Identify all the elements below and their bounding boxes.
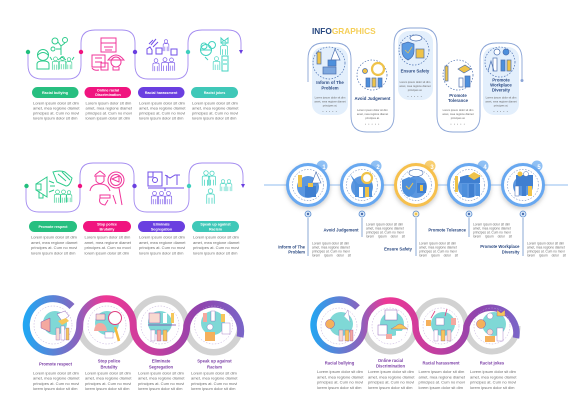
icon: speak up against racism [194,306,232,344]
step 4 [448,160,490,217]
icon: ensure safety [399,35,429,65]
pale card backgrounds [312,31,519,115]
description texts: principes at. Cum no movi [84,245,131,250]
step descriptions: lorem ipsum dolor sit [473,234,512,238]
label pills: Racism [209,228,223,232]
ribbon titles: Speak up against [197,358,232,364]
description texts: amet, mea regione diamet [193,240,240,245]
card titles: Ensure Safety [401,68,430,74]
card titles [316,68,512,103]
step descriptions: Lorem ipsum dolor sit dim [473,222,510,226]
icon: racist jokes [474,308,510,344]
card descriptions and dots: • • • • • [408,96,422,98]
ribbon titles: Brutality [100,364,118,370]
icon: stop police brutality [88,306,126,344]
step descriptions: Lorem ipsum dolor sit dim [419,242,456,246]
step titles: Promote Tolerance [428,228,467,232]
icon: inform of the problem [313,47,345,79]
card descriptions and dots: principes at. [323,104,337,108]
serpentine line [28,30,241,79]
label pills: Discrimination [95,93,122,97]
ribbon descriptions: amet, mea regione diamet [33,376,80,380]
panel: racial issues gradient ribbon [314,300,518,390]
description texts: Lorem ipsum dolor sit dim [33,100,79,106]
ribbon descriptions [317,369,517,390]
ribbon descriptions: amet, mea regione diamet [470,374,517,380]
description texts: amet, mea regione diamet [139,240,186,245]
ribbon titles: Racist jokes [480,360,505,366]
ribbon descriptions: amet, mea regione diamet [191,376,238,380]
step titles: Inform of The [278,244,306,250]
ribbon titles [325,358,505,368]
step titles: Diversity [502,250,520,254]
step descriptions: principes at. Cum no movi [312,250,350,254]
ribbon descriptions: amet, mea regione diamet [138,376,185,380]
step descriptions: amet, mea regione diamet [312,246,350,250]
description texts: lorem ipsum dolor sit dim [139,116,184,120]
step descriptions: Lorem ipsum dolor sit dim [527,242,564,246]
step descriptions [312,222,566,258]
icon: speak up against racism [202,171,232,204]
step descriptions: Lorem ipsum dolor sit dim [366,222,403,226]
icon: promote workplace diversity [485,47,515,77]
description texts: principes at. Cum no movi [33,110,79,116]
ribbon descriptions: lorem ipsum dolor sit dim [138,386,183,391]
icon: eliminate segregation [148,172,184,204]
label pills: Eliminate [153,222,170,226]
ribbon descriptions: principes at. Cum no movi [85,381,131,386]
ribbon titles: Segregation [149,364,174,370]
description texts [33,100,239,120]
ribbon descriptions: Lorem ipsum dolor sit dim [85,370,131,376]
ribbon titles [39,358,232,370]
ribbon descriptions: principes at. Cum no movi [317,380,363,384]
description texts: Lorem ipsum dolor sit dim [139,100,185,106]
serpentine line [26,163,243,212]
description texts: principes at. Cum no movi [31,245,77,250]
description texts: principes at. Cum no movi [192,110,238,116]
serpentine outline [308,28,522,132]
grey ribbon [80,299,240,352]
card descriptions and dots: amet, mea regione diamet [357,112,388,116]
icon: eliminate segregation [141,306,179,344]
title: INFOGRAPHICS [312,26,376,36]
label pills: Racist jokes [204,91,225,95]
step descriptions: amet, mea regione diamet [473,226,511,230]
card descriptions and dots: • • • • • [451,123,465,126]
ribbon descriptions: lorem ipsum dolor sit dim [317,385,362,390]
ribbon descriptions: principes at. Cum no movi [138,381,184,386]
description texts: amet, mea regione diamet [31,240,78,245]
label pills: Promote respect [38,225,68,229]
description texts: principes at. Cum no movi [139,110,185,116]
step descriptions: principes at. Cum no movi [366,230,404,234]
description texts: principes at. Cum no movi [193,245,239,250]
icon: racist jokes [200,38,228,71]
card titles: Avoid Judgement [355,96,391,101]
label pills: Brutality [100,228,115,232]
step titles: Avoid Judgement [324,228,359,232]
ribbon descriptions: Lorem ipsum dolor sit dim [368,369,414,374]
step descriptions: principes at. Cum no movi [473,230,511,234]
ribbon descriptions: Lorem ipsum dolor sit dim [191,370,237,376]
ribbon titles: Racial harassment [422,360,460,366]
icon: online racial discrimination [372,308,408,344]
description texts: Lorem ipsum dolor sit dim [84,234,131,240]
step titles [278,228,520,254]
ribbon descriptions: principes at. Cum no movi [470,380,516,384]
panel: infographics cards [308,26,524,132]
label pills [32,87,238,98]
ribbon titles: Racism [207,364,222,370]
card descriptions and dots: principes at. [451,116,465,120]
gradient ribbon [26,299,241,352]
description texts: amet, mea regione diamet [139,106,186,110]
step descriptions: lorem ipsum dolor sit [312,254,351,258]
step descriptions: amet, mea regione diamet [527,246,565,250]
ribbon descriptions: amet, mea regione diamet [317,374,364,380]
ribbon descriptions: principes at. Cum no movi [191,381,237,386]
ribbon titles: Stop police [98,358,121,364]
label pills: Online racial [97,88,119,92]
card descriptions and dots: Lorem ipsum dolor sit dim [443,108,474,112]
ribbon descriptions: amet, mea regione diamet [368,374,415,380]
icons [313,35,515,90]
card descriptions and dots: • • • • • [365,123,380,126]
description texts: Lorem ipsum dolor sit dim [86,100,132,106]
step 5 [502,160,544,217]
ribbon titles: Discrimination [376,364,405,368]
step 5: 5 [537,165,541,171]
description texts: amet, mea regione diamet [33,106,80,110]
description texts: amet, mea regione diamet [192,106,239,110]
card titles: Inform of The [316,80,344,85]
label pills: Speak up against [200,222,231,226]
step markers [24,184,245,188]
card titles: Diversity [492,88,511,92]
description texts: lorem ipsum dolor sit dim [193,250,238,256]
card descriptions and dots: Lorem ipsum dolor sit dim [315,96,346,100]
card descriptions and dots: principes at. [494,104,508,108]
ribbon descriptions: Lorem ipsum dolor sit dim [470,369,516,374]
icon: stop police brutality [90,171,124,205]
ribbon descriptions: lorem ipsum dolor sit dim [33,386,78,391]
description texts: lorem ipsum dolor sit dim [139,250,184,256]
card descriptions and dots: • • • • • [494,110,508,114]
ribbon descriptions: lorem ipsum dolor sit dim [85,386,130,391]
description texts: lorem ipsum dolor sit dim [31,250,76,256]
card descriptions and dots: • • • • • [323,110,337,114]
ribbon descriptions: amet, mea regione diamet [85,376,132,380]
card descriptions and dots: Lorem ipsum dolor sit dim [357,108,389,112]
step 2: 2 [376,165,380,171]
ribbon titles: Eliminate [152,358,171,364]
description texts: principes at. Cum no movi [139,245,185,250]
panel: racial issues timeline, outlined [26,30,243,120]
ribbon titles: Online racial [378,358,403,363]
ribbon descriptions: lorem ipsum dolor sit dim [368,385,413,390]
description texts: Lorem ipsum dolor sit dim [139,234,185,240]
ribbon descriptions [33,370,238,391]
step circles [288,160,544,217]
card titles: Promote [492,78,510,82]
card descriptions and dots: Lorem ipsum dolor sit dim [486,96,517,100]
card descriptions and dots: amet, mea regione diamet [399,84,431,88]
icon: racial harassment [147,39,177,71]
ribbon descriptions: lorem ipsum dolor sit dim [191,386,236,391]
connector line [264,184,568,186]
ribbon descriptions: Lorem ipsum dolor sit dim [418,369,465,374]
step 4: 4 [483,165,487,171]
ribbon descriptions: principes at. Cum no movi [418,380,465,384]
description texts: Lorem ipsum dolor sit dim [192,100,238,106]
card descriptions and dots: amet, mea regione diamet [314,100,346,104]
description texts: Lorem ipsum dolor sit dim [31,234,77,240]
icon: promote tolerance [443,60,473,90]
label pills: Racial harassment [145,91,178,95]
step descriptions: lorem ipsum dolor sit [366,234,405,238]
gradient ribbon [314,300,516,352]
step titles: Ensure Safety [384,246,413,252]
ribbon descriptions: principes at. Cum no movi [368,380,414,384]
step descriptions: principes at. Cum no movi [419,250,457,254]
icon: promote respect [36,171,72,203]
description texts: amet, mea regione diamet [84,240,132,245]
description texts: amet, mea regione diamet [86,106,133,110]
icon: online racial discrimination [92,38,124,70]
card titles: Workplace [490,82,512,88]
step descriptions: lorem ipsum dolor sit [527,254,566,258]
step markers [26,50,243,54]
ribbon descriptions: Lorem ipsum dolor sit dim [317,369,363,374]
ribbon descriptions: Lorem ipsum dolor sit dim [33,370,79,376]
step 3: 3 [430,165,434,171]
icon: racial bullying [37,38,74,70]
card titles: Tolerance [448,98,469,103]
label pills: Stop police [97,222,117,226]
description texts [31,234,240,256]
step descriptions: amet, mea regione diamet [419,246,457,250]
label pills: Racial bullying [42,91,68,95]
card descriptions and dots: principes at. [408,88,422,92]
card descriptions and dots: amet, mea regione diamet [442,112,474,116]
card descriptions and dots [314,80,517,126]
icon: racial harassment [423,308,459,344]
step 1 [288,160,328,217]
description texts: lorem ipsum dolor sit dim [33,116,78,120]
step 2 [342,160,382,217]
step descriptions: amet, mea regione diamet [366,226,404,230]
description texts: lorem ipsum dolor sit dim [84,250,130,256]
icon: promote respect [34,306,72,344]
step titles: Problem [288,250,305,254]
panel: circular blue timeline [264,160,568,258]
description texts: lorem ipsum dolor sit dim [192,116,237,120]
description texts: lorem ipsum dolor sit dim [86,116,131,120]
label pills [29,221,239,232]
card descriptions and dots: amet, mea regione diamet [485,100,517,104]
ribbon descriptions: principes at. Cum no movi [33,381,79,386]
card descriptions and dots: Lorem ipsum dolor sit dim [400,80,431,84]
icon: racial bullying [321,308,357,344]
panel: anti-racism actions timeline, outlined [24,163,245,256]
step descriptions: principes at. Cum no movi [527,250,565,254]
card descriptions and dots: principes at. [365,116,380,120]
ribbon descriptions: Lorem ipsum dolor sit dim [138,370,184,376]
ribbon titles: Promote respect [39,362,73,366]
step titles: Promote Workplace [480,244,520,249]
step descriptions: lorem ipsum dolor sit [419,254,458,258]
ribbon titles: Racial bullying [325,360,355,366]
step 3 [396,160,436,217]
description texts: Lorem ipsum dolor sit dim [193,234,239,240]
label pills: Segregation [151,228,173,232]
ribbon descriptions: amet, mea regione diamet [418,374,466,380]
panel: anti-racism gradient ribbon [26,299,241,391]
card titles: Problem [321,86,339,90]
icon: avoid judgement [357,60,387,90]
description texts: principes at. Cum no movi [86,110,132,116]
ribbon descriptions: lorem ipsum dolor sit dim [470,385,515,390]
step 1: 1 [322,165,326,171]
ribbon descriptions: lorem ipsum dolor sit dim [418,385,464,390]
vertical leader lines [308,218,523,256]
card titles: Promote [449,93,467,98]
grey ribbon [364,300,518,352]
step descriptions: Lorem ipsum dolor sit dim [312,242,349,246]
